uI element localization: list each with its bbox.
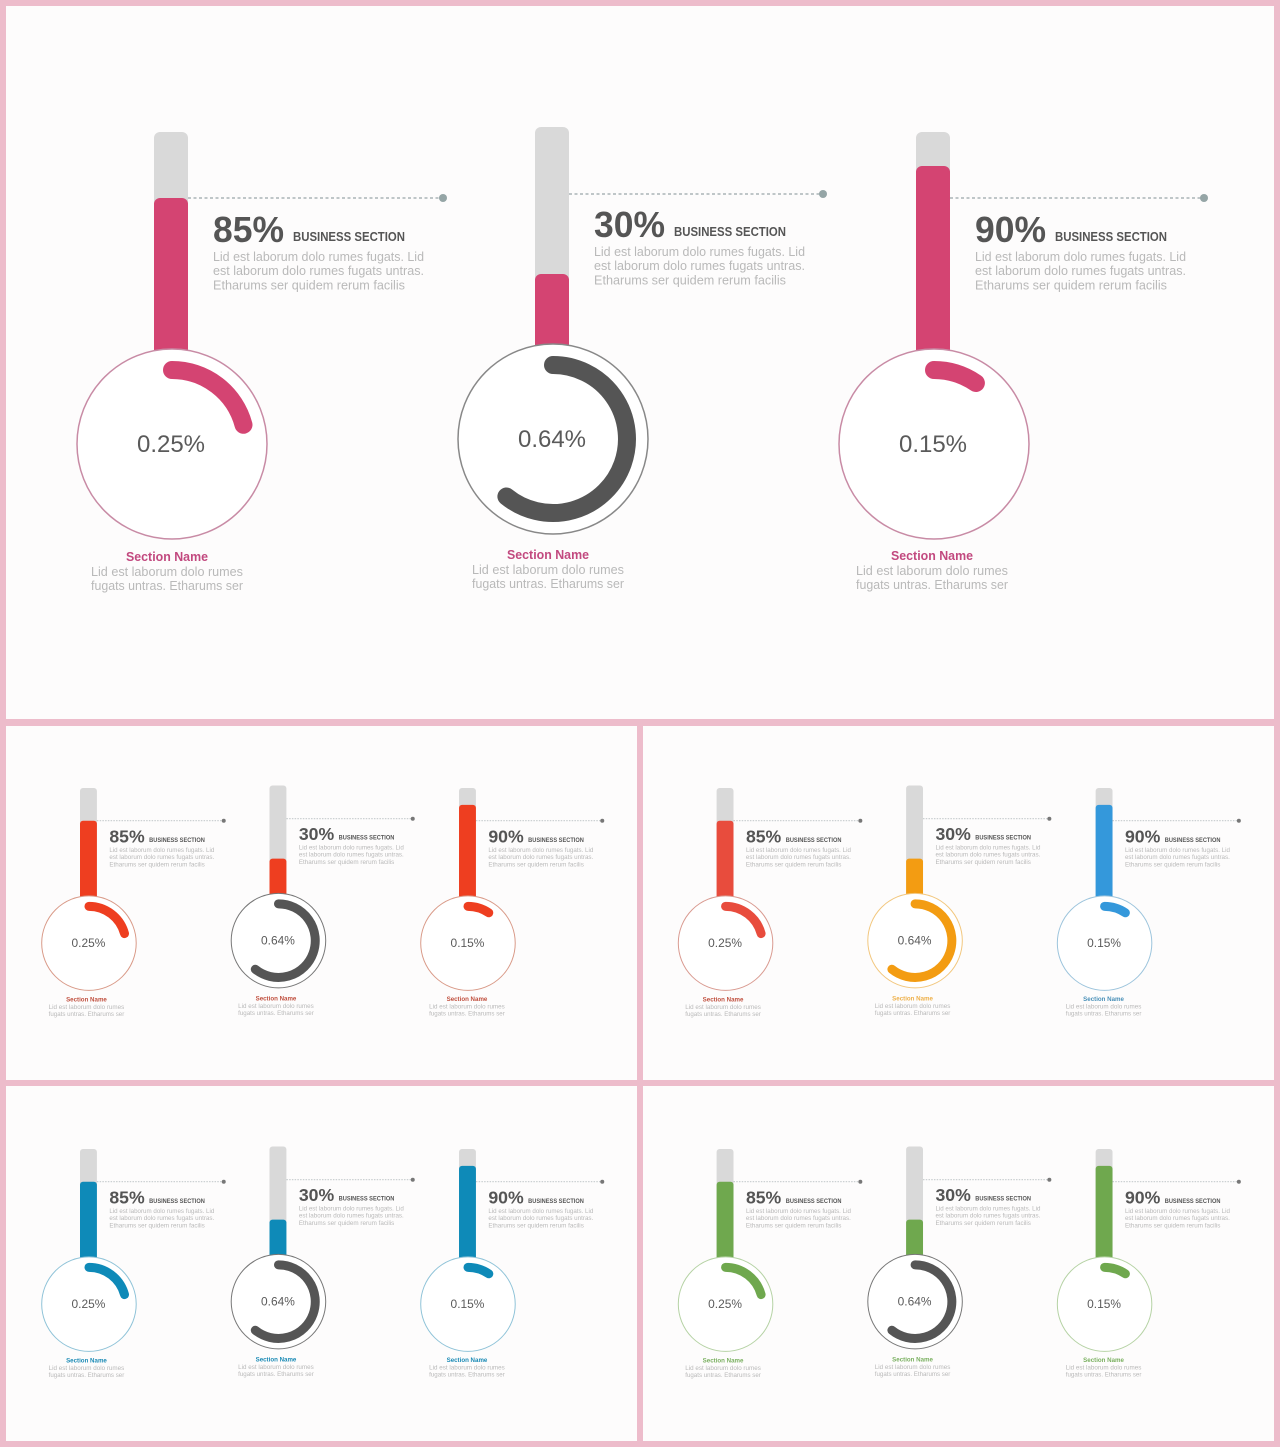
gauge: 30% teal: fugats untras. Etharums ser xyxy=(238,1371,314,1378)
gauge: 90% teal: fugats untras. Etharums ser xyxy=(429,1371,505,1378)
gauge: 30% red: 0.64% xyxy=(261,934,295,948)
gauge: 85% pink xyxy=(77,132,447,593)
gauge: 30% pink: 30% xyxy=(594,204,665,245)
gauge: 30% pink: Lid est laborum dolo rumes xyxy=(472,563,624,577)
gauge: 85% green: 0.25% xyxy=(708,1297,742,1311)
gauge: 30% pink: Lid est laborum dolo rumes fugats. Lid xyxy=(594,245,805,259)
gauge: 90% red: est laborum dolo rumes fugats untras. xyxy=(488,854,594,861)
panel: small green slide xyxy=(678,1146,1241,1379)
gauge: 85% pink: 0.25% xyxy=(137,431,205,458)
gauge: 90% green: 90% xyxy=(1125,1188,1160,1208)
gauge: 85% red: Lid est laborum dolo rumes fugats. Lid xyxy=(109,847,215,854)
gauge: 30% green: 0.64% xyxy=(898,1295,932,1309)
gauge: 85% red: Etharums ser quidem rerum facilis xyxy=(109,861,205,868)
gauge: 90% red: Lid est laborum dolo rumes xyxy=(429,1003,505,1010)
gauge: 30% pink: Section Name xyxy=(507,548,589,562)
gauge: 30% pink: Etharums ser quidem rerum facilis xyxy=(594,274,786,288)
gauge: 85% green: Section Name xyxy=(703,1357,744,1364)
gauge: 85% coral: 0.25% xyxy=(708,936,742,950)
gauge: 90% red: fugats untras. Etharums ser xyxy=(429,1010,505,1017)
gauge: 85% pink: Section Name xyxy=(126,550,208,564)
gauge: 85% teal: Section Name xyxy=(66,1357,107,1364)
gauge: 85% coral: est laborum dolo rumes fugats untras. xyxy=(746,854,851,861)
gauge: 90% teal: Section Name xyxy=(447,1357,488,1364)
gauge: 85% pink: fugats untras. Etharums ser xyxy=(91,579,243,593)
gauge: 85% red: Lid est laborum dolo rumes xyxy=(49,1004,124,1011)
gauge: 85% teal: Lid est laborum dolo rumes xyxy=(49,1365,124,1372)
gauge: 85% pink: BUSINESS SECTION xyxy=(293,230,405,244)
gauge: 90% blue: est laborum dolo rumes fugats untras. xyxy=(1125,854,1230,861)
gauge: 90% pink: Lid est laborum dolo rumes fugats. Lid xyxy=(975,250,1186,264)
gauge: 90% blue: 0.15% xyxy=(1087,936,1121,950)
gauge: 85% green: fugats untras. Etharums ser xyxy=(685,1372,761,1379)
gauge: 30% green: Etharums ser quidem rerum facilis xyxy=(935,1220,1031,1227)
gauge: 85% coral: Lid est laborum dolo rumes fugats. Lid xyxy=(746,847,851,854)
gauge: 30% orange: 30% xyxy=(935,824,971,844)
gauge: 90% pink: Etharums ser quidem rerum facilis xyxy=(975,278,1167,292)
gauge: 85% teal: Lid est laborum dolo rumes fugats. Lid xyxy=(109,1208,215,1215)
gauge: 30% red: Etharums ser quidem rerum facilis xyxy=(299,859,394,866)
gauge: 90% pink: Lid est laborum dolo rumes xyxy=(856,564,1008,578)
gauge: 90% pink: 0.15% xyxy=(899,431,967,458)
gauge: 30% green xyxy=(868,1146,1051,1378)
gauge: 90% blue: Section Name xyxy=(1083,996,1125,1003)
gauge: 85% coral: 85% xyxy=(746,827,781,847)
gauge: 30% teal: 30% xyxy=(299,1185,334,1205)
gauge: 90% blue xyxy=(1057,788,1241,1017)
gauge: 30% red: Lid est laborum dolo rumes fugats. Lid xyxy=(299,845,404,852)
gauge: 85% red: est laborum dolo rumes fugats untras. xyxy=(109,854,215,861)
gauge: 85% coral: Section Name xyxy=(703,996,744,1003)
gauge: 90% red: Section Name xyxy=(447,996,488,1003)
gauge: 85% pink: 85% xyxy=(213,209,284,250)
gauge: 30% teal: est laborum dolo rumes fugats untras. xyxy=(299,1213,404,1220)
gauge: 85% coral: BUSINESS SECTION xyxy=(786,837,842,844)
gauge: 90% red: Lid est laborum dolo rumes fugats. Lid xyxy=(488,847,594,854)
panel: large slide background xyxy=(6,6,1274,719)
gauge: 30% orange: BUSINESS SECTION xyxy=(975,835,1031,842)
gauge: 90% pink: est laborum dolo rumes fugats untras. xyxy=(975,264,1186,278)
gauge: 30% orange: 0.64% xyxy=(898,934,932,948)
gauge: 30% orange xyxy=(868,785,1051,1017)
gauge: 85% pink: est laborum dolo rumes fugats untras. xyxy=(213,264,424,278)
gauge: 85% coral: Lid est laborum dolo rumes xyxy=(685,1004,761,1011)
gauge: 90% red: 90% xyxy=(488,827,524,847)
gauge: 85% red: fugats untras. Etharums ser xyxy=(49,1011,124,1018)
gauge: 90% blue: Lid est laborum dolo rumes fugats. Lid xyxy=(1125,847,1230,854)
gauge: 85% red: Section Name xyxy=(66,996,107,1003)
gauge: 90% teal: Etharums ser quidem rerum facilis xyxy=(488,1222,584,1229)
gauge: 90% teal: 90% xyxy=(488,1188,524,1208)
panel: top-left slide background xyxy=(6,726,637,1080)
gauge: 85% green: Etharums ser quidem rerum facilis xyxy=(746,1222,841,1229)
gauge: 90% teal: Lid est laborum dolo rumes fugats. Lid xyxy=(488,1208,594,1215)
gauge: 85% green: est laborum dolo rumes fugats untras. xyxy=(746,1215,851,1222)
panel: small red slide xyxy=(42,785,604,1018)
gauge: 30% red xyxy=(231,785,415,1017)
gauge: 30% teal: Section Name xyxy=(256,1356,297,1363)
gauge: 90% red: Etharums ser quidem rerum facilis xyxy=(488,861,584,868)
gauge: 30% teal xyxy=(231,1146,415,1378)
gauge: 90% green: Section Name xyxy=(1083,1357,1125,1364)
panel: top-right slide background xyxy=(643,726,1274,1080)
gauge: 90% blue: 90% xyxy=(1125,827,1160,847)
gauge: 90% teal: BUSINESS SECTION xyxy=(528,1198,584,1205)
panel: small teal-blue slide xyxy=(42,1146,604,1379)
gauge: 85% teal: 85% xyxy=(109,1188,145,1208)
gauge: 85% coral xyxy=(678,788,862,1018)
gauge: 90% green xyxy=(1057,1149,1241,1378)
gauge: 85% red xyxy=(42,788,226,1018)
gauge: 85% red: BUSINESS SECTION xyxy=(149,837,205,844)
panel: small multicolor slide xyxy=(678,785,1241,1018)
gauge: 90% green: Lid est laborum dolo rumes xyxy=(1066,1364,1141,1371)
gauge: 85% pink: Lid est laborum dolo rumes xyxy=(91,565,243,579)
gauge: 30% teal: Lid est laborum dolo rumes fugats. Lid xyxy=(299,1206,404,1213)
gauge: 30% pink: BUSINESS SECTION xyxy=(674,225,786,239)
gauge: 90% pink: 90% xyxy=(975,209,1046,250)
gauge: 85% teal: fugats untras. Etharums ser xyxy=(49,1372,124,1379)
gauge: 30% orange: fugats untras. Etharums ser xyxy=(875,1010,950,1017)
gauge: 90% red: BUSINESS SECTION xyxy=(528,837,584,844)
gauge: 85% pink: Lid est laborum dolo rumes fugats. Lid xyxy=(213,250,424,264)
gauge: 90% green: 0.15% xyxy=(1087,1297,1121,1311)
gauge: 30% teal: Lid est laborum dolo rumes xyxy=(238,1364,314,1371)
gauge: 30% red: fugats untras. Etharums ser xyxy=(238,1010,314,1017)
gauge: 90% pink: fugats untras. Etharums ser xyxy=(856,578,1008,592)
gauge: 90% blue: BUSINESS SECTION xyxy=(1165,837,1221,844)
gauge: 30% red: BUSINESS SECTION xyxy=(339,835,395,842)
gauge: 30% red: est laborum dolo rumes fugats untras. xyxy=(299,852,404,859)
gauge: 30% green: fugats untras. Etharums ser xyxy=(875,1371,950,1378)
gauge: 30% orange: Section Name xyxy=(892,995,934,1002)
gauge: 85% green: 85% xyxy=(746,1188,781,1208)
gauge: 85% green: BUSINESS SECTION xyxy=(786,1198,842,1205)
gauge: 85% green: Lid est laborum dolo rumes xyxy=(685,1365,761,1372)
gauge: 90% green: fugats untras. Etharums ser xyxy=(1066,1371,1141,1378)
gauge: 85% teal: BUSINESS SECTION xyxy=(149,1198,205,1205)
gauge: 85% teal: 0.25% xyxy=(72,1297,106,1311)
panel: bottom-right slide background xyxy=(643,1086,1274,1441)
gauge: 30% green: est laborum dolo rumes fugats untras. xyxy=(935,1213,1041,1220)
gauge: 90% green: Etharums ser quidem rerum facilis xyxy=(1125,1222,1220,1229)
gauge: 30% red: 30% xyxy=(299,824,334,844)
gauge: 30% teal: 0.64% xyxy=(261,1295,295,1309)
gauge: 90% blue: Etharums ser quidem rerum facilis xyxy=(1125,861,1220,868)
gauge: 30% red: Lid est laborum dolo rumes xyxy=(238,1003,314,1010)
panel: large pink slide xyxy=(77,127,1208,593)
gauge: 90% teal: est laborum dolo rumes fugats untras. xyxy=(488,1215,594,1222)
gauge: 90% green: Lid est laborum dolo rumes fugats. Lid xyxy=(1125,1208,1230,1215)
panel: bottom-left slide background xyxy=(6,1086,637,1441)
gauge: 90% red: 0.15% xyxy=(451,936,485,950)
gauge: 90% blue: Lid est laborum dolo rumes xyxy=(1066,1003,1141,1010)
gauge: 30% green: Section Name xyxy=(892,1356,934,1363)
gauge: 30% orange: Etharums ser quidem rerum facilis xyxy=(935,859,1031,866)
gauge: 90% teal xyxy=(421,1149,604,1378)
gauge: 85% teal: Etharums ser quidem rerum facilis xyxy=(109,1222,205,1229)
gauge: 30% pink: 0.64% xyxy=(518,426,586,453)
gauge: 90% pink xyxy=(839,132,1208,592)
gauge: 30% pink: fugats untras. Etharums ser xyxy=(472,577,624,591)
gauge: 30% teal: Etharums ser quidem rerum facilis xyxy=(299,1220,394,1227)
gauge: 30% pink: est laborum dolo rumes fugats untras. xyxy=(594,259,805,273)
gauge: 90% green: BUSINESS SECTION xyxy=(1165,1198,1221,1205)
gauge: 30% orange: est laborum dolo rumes fugats untras. xyxy=(935,852,1041,859)
gauge: 90% teal: Lid est laborum dolo rumes xyxy=(429,1364,505,1371)
gauge: 90% green: est laborum dolo rumes fugats untras. xyxy=(1125,1215,1230,1222)
gauge: 30% green: Lid est laborum dolo rumes xyxy=(875,1364,950,1371)
gauge: 30% green: 30% xyxy=(935,1185,971,1205)
gauge: 30% green: BUSINESS SECTION xyxy=(975,1196,1031,1203)
gauge: 30% red: Section Name xyxy=(256,995,297,1002)
gauge: 85% pink: Etharums ser quidem rerum facilis xyxy=(213,278,405,292)
gauge: 90% blue: fugats untras. Etharums ser xyxy=(1066,1010,1141,1017)
gauge: 85% teal xyxy=(42,1149,226,1379)
gauge: 90% pink: Section Name xyxy=(891,549,973,563)
gauge: 90% red xyxy=(421,788,604,1017)
gauge: 85% green: Lid est laborum dolo rumes fugats. Lid xyxy=(746,1208,851,1215)
gauge: 90% teal: 0.15% xyxy=(451,1297,485,1311)
gauge: 30% orange: Lid est laborum dolo rumes xyxy=(875,1003,950,1010)
gauge: 85% coral: fugats untras. Etharums ser xyxy=(685,1011,761,1018)
gauge: 30% pink xyxy=(458,127,827,591)
gauge: 85% red: 0.25% xyxy=(72,936,106,950)
gauge: 85% green xyxy=(678,1149,862,1379)
gauge: 85% coral: Etharums ser quidem rerum facilis xyxy=(746,861,841,868)
gauge: 30% orange: Lid est laborum dolo rumes fugats. Lid xyxy=(935,845,1041,852)
gauge: 30% green: Lid est laborum dolo rumes fugats. Lid xyxy=(935,1206,1041,1213)
gauge: 85% teal: est laborum dolo rumes fugats untras. xyxy=(109,1215,215,1222)
gauge: 30% teal: BUSINESS SECTION xyxy=(339,1196,395,1203)
gauge: 90% pink: BUSINESS SECTION xyxy=(1055,230,1167,244)
gauge: 85% red: 85% xyxy=(109,827,145,847)
